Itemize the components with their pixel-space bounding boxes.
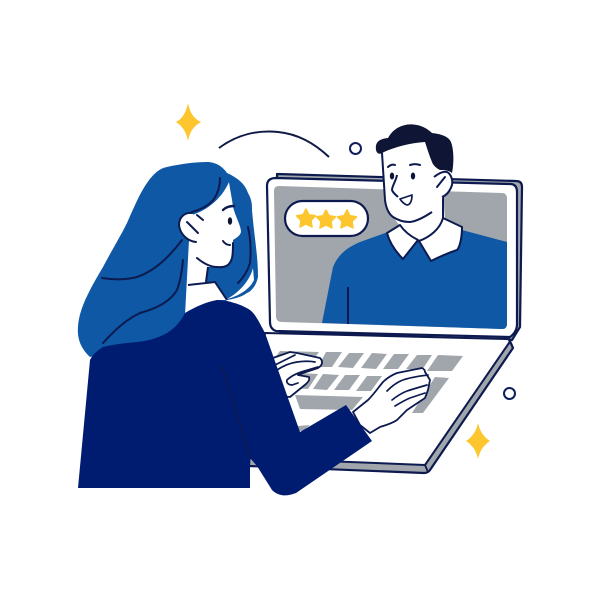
icon: small ring bottom <box>504 388 515 399</box>
icon: star 1 <box>296 209 316 227</box>
rating badge <box>285 201 368 236</box>
left hand <box>270 352 322 397</box>
screen bezel <box>267 178 517 337</box>
laptop base <box>248 333 513 473</box>
bangs line <box>192 178 220 212</box>
collar left flap <box>387 225 418 259</box>
brow, eye, mouth <box>223 206 234 210</box>
hair <box>376 124 453 173</box>
ear <box>432 172 452 197</box>
base side edge <box>249 339 513 473</box>
icon: sparkle top left <box>176 103 201 141</box>
hair <box>78 162 258 357</box>
eyes <box>390 172 394 180</box>
woman <box>78 162 372 495</box>
icon: sparkle bottom right <box>466 423 490 459</box>
icon: star 3 <box>338 210 356 228</box>
man head <box>376 124 462 261</box>
jaw <box>197 243 233 267</box>
sleeve line <box>222 366 250 458</box>
neck <box>393 190 445 241</box>
jacket <box>78 300 372 495</box>
decorative arc <box>219 132 329 157</box>
face and neck <box>185 182 241 315</box>
right hand <box>353 368 430 433</box>
icon: small ring top <box>350 143 361 154</box>
hair strands <box>102 227 251 343</box>
ear <box>179 213 198 242</box>
nose <box>392 175 398 197</box>
icon: star 2 <box>316 210 336 228</box>
keyboard keys <box>268 351 463 431</box>
laptop screen <box>267 124 522 340</box>
man sweater <box>322 230 507 329</box>
face <box>382 142 450 222</box>
mouth <box>400 195 412 205</box>
eyebrows <box>388 164 420 167</box>
base top <box>248 333 510 465</box>
hair wisp gap <box>227 268 254 299</box>
sweater sleeve line <box>347 287 349 324</box>
collar right flap <box>419 218 462 261</box>
screen display <box>274 186 507 329</box>
collar lines <box>188 282 227 300</box>
screen back plate <box>277 174 522 340</box>
